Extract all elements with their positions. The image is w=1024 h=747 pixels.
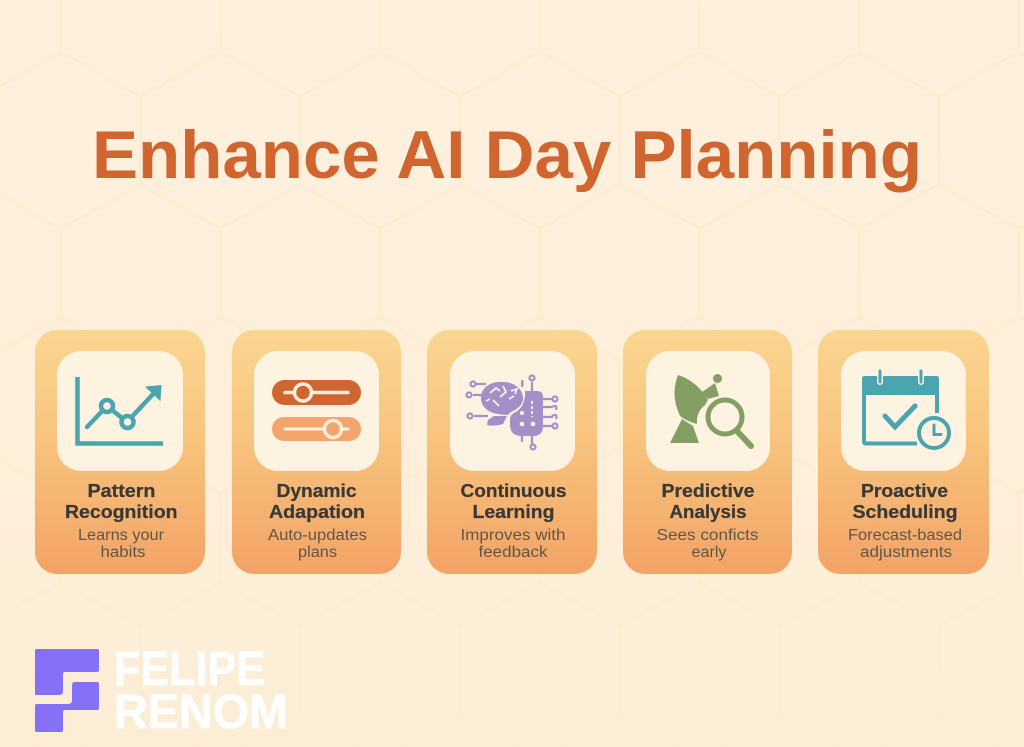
heading: Continuous Learning [460, 480, 566, 522]
heading: Dynamic Adapation: Adapation [269, 501, 365, 522]
panel: predictive analysis [623, 330, 792, 574]
icon: logo mark [35, 649, 99, 732]
description: Improves with feedback [460, 527, 566, 561]
logo: Felipe Renom [35, 643, 288, 739]
panel: proactive scheduling [818, 330, 989, 574]
heading: Predictive Analysis: Predictive [662, 480, 754, 501]
description: Forecast-based adjustments: adjustments [860, 544, 952, 561]
heading: Proactive Scheduling: Proactive [861, 480, 948, 501]
description: Forecast-based adjustments [848, 527, 962, 561]
description: Learns your habits: habits [100, 544, 146, 561]
heading: Continuous Learning: Continuous [460, 480, 566, 501]
heading: Pattern Recognition: Pattern [88, 480, 156, 501]
logo wordmark: RENOM [114, 686, 288, 739]
description: Auto-updates plans: plans [298, 544, 337, 561]
heading: Continuous Learning: Learning [472, 501, 554, 522]
description: Forecast-based adjustments: Forecast-based [848, 527, 962, 544]
description: Learns your habits [78, 527, 164, 561]
logo wordmark: FELIPE [114, 643, 265, 696]
description: Sees conficts early [656, 527, 759, 561]
heading: Dynamic Adapation [269, 480, 365, 522]
description: Auto-updates plans: Auto-updates [268, 527, 367, 544]
heading: Pattern Recognition: Recognition [65, 501, 178, 522]
title: Enhance AI Day Planning [92, 117, 922, 193]
description: Sees conficts early: Sees conficts [656, 527, 759, 544]
description: Improves with feedback: Improves with [460, 527, 566, 544]
heading: Proactive Scheduling [852, 480, 958, 522]
heading: Dynamic Adapation: Dynamic [276, 480, 356, 501]
icon: sliders [272, 380, 361, 441]
logo wordmark [114, 643, 288, 739]
icon: line chart with arrow [78, 377, 163, 444]
description: Sees conficts early: early [692, 544, 727, 561]
icon: satellite dish and magnifier [670, 374, 751, 446]
heading: Predictive Analysis: Analysis [670, 501, 746, 522]
panel: continuous learning [427, 330, 597, 574]
description: Learns your habits: Learns your [78, 527, 164, 544]
heading: Pattern Recognition [65, 480, 178, 522]
heading: Predictive Analysis [662, 480, 754, 522]
icon: calendar with check and clock [862, 371, 949, 448]
panel: pattern recognition [35, 330, 205, 574]
description: Auto-updates plans [268, 527, 367, 561]
heading: Proactive Scheduling: Scheduling [852, 501, 958, 522]
description: Improves with feedback: feedback [478, 544, 548, 561]
panel: dynamic adapation [232, 330, 401, 574]
icon: brain and chip [466, 376, 558, 450]
